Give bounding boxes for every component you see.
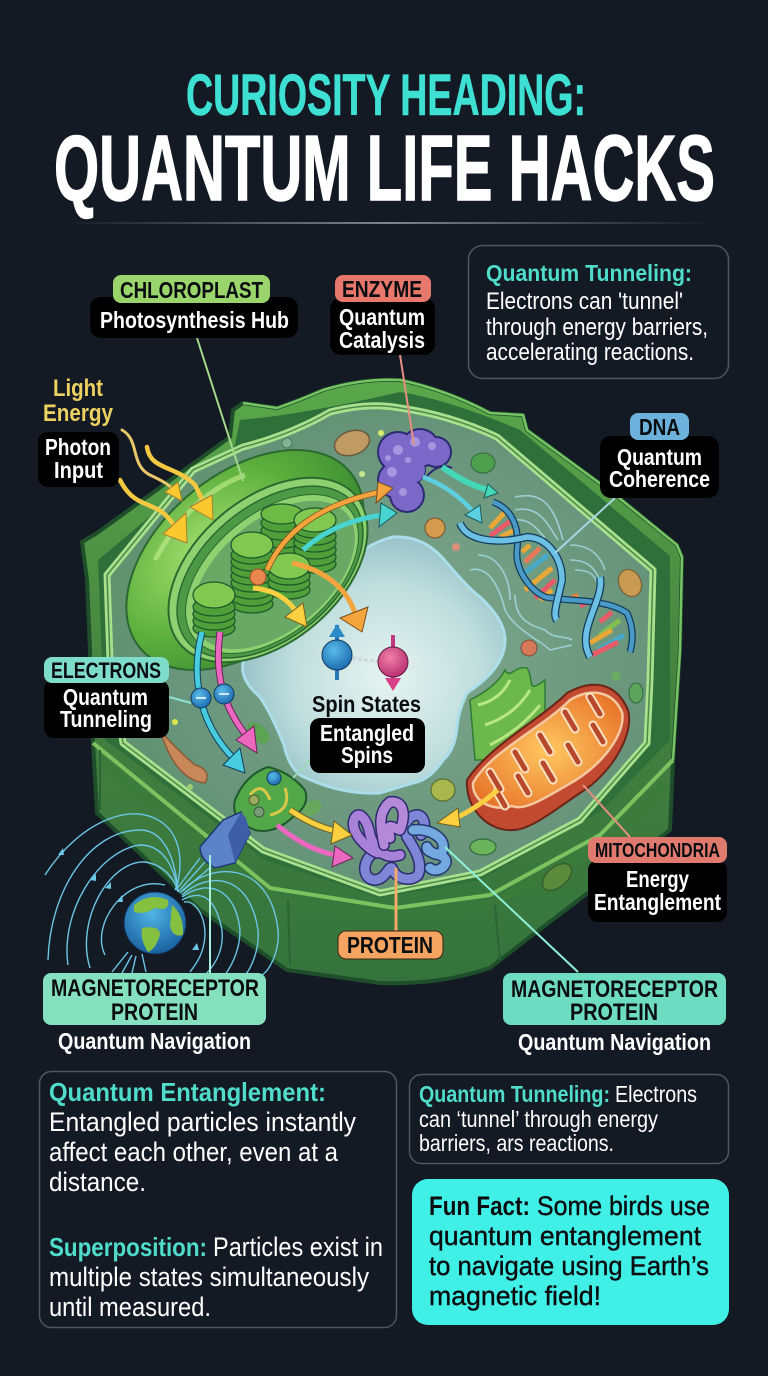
enzyme xyxy=(377,428,452,513)
arrow: enzyme to DNA teal xyxy=(442,467,498,498)
label: magnetoreceptor right xyxy=(503,973,726,1055)
label: magnetoreceptor left: Quantum Navigation xyxy=(58,1028,251,1054)
label: DNA: Quantum xyxy=(617,444,702,470)
arrow: orange to enzyme xyxy=(267,482,393,570)
panel: quantum tunneling top: through energy barriers, xyxy=(486,314,708,341)
panel: quantum tunneling bottom: barriers, ars reactions. xyxy=(419,1130,614,1156)
label: spin states: Entangled xyxy=(320,720,414,746)
label: magnetoreceptor right: PROTEIN xyxy=(570,999,658,1026)
arrow: enzyme to DNA cyan xyxy=(423,477,482,523)
label: spin states xyxy=(310,691,425,773)
label: electrons: Quantum xyxy=(63,684,148,710)
chloroplast xyxy=(85,406,405,714)
label: chloroplast: Photosynthesis Hub xyxy=(100,307,289,333)
vacuole xyxy=(243,537,505,793)
protein knot xyxy=(353,802,446,880)
panel: entanglement and superposition: Particles exist in xyxy=(213,1232,383,1262)
label: mitochondria: Entanglement xyxy=(594,889,721,915)
golgi xyxy=(470,668,545,760)
mitochondrion xyxy=(467,685,629,830)
panel: entanglement and superposition: Entangled particles instantly xyxy=(49,1107,356,1137)
grana stacks xyxy=(193,504,336,637)
panel: quantum tunneling bottom: Quantum Tunneling: xyxy=(419,1081,610,1107)
panel: quantum tunneling top: accelerating reactions. xyxy=(486,339,694,366)
arrow: pink to protein xyxy=(277,825,353,867)
panel: entanglement and superposition: multiple states simultaneously xyxy=(49,1262,369,1292)
earth xyxy=(124,892,186,954)
panel: entanglement and superposition: affect each other, even at a xyxy=(49,1137,339,1167)
arrow: yellow to protein xyxy=(290,810,352,844)
panel: quantum tunneling top xyxy=(468,246,728,378)
panel: entanglement and superposition: until measured. xyxy=(49,1292,211,1322)
label: magnetoreceptor left: MAGNETORECEPTOR xyxy=(51,975,259,1002)
label: DNA: DNA xyxy=(639,414,680,440)
label: enzyme: ENZYME xyxy=(342,276,422,302)
small organelles xyxy=(331,426,373,460)
panel: fun fact: to navigate using Earth’s xyxy=(429,1251,709,1281)
magnetoreceptor cylinder xyxy=(200,812,250,868)
label: enzyme xyxy=(330,275,435,355)
label: mitochondria xyxy=(588,837,727,922)
panel: fun fact: Some birds use xyxy=(537,1191,710,1221)
label: light energy xyxy=(38,375,119,487)
panel: fun fact: Fun Fact: xyxy=(429,1191,530,1221)
plant cell illustration xyxy=(45,380,682,983)
label: spin states: Spin States xyxy=(312,691,421,717)
panel: quantum tunneling bottom xyxy=(410,1074,728,1164)
icon: electrons xyxy=(191,684,234,708)
magnetic field lines xyxy=(45,814,278,975)
arrow: teal to enzyme xyxy=(303,503,397,550)
panel: fun fact: magnetic field! xyxy=(429,1281,601,1311)
label: electrons: Tunneling xyxy=(60,706,152,732)
panel: quantum tunneling bottom: Electrons xyxy=(615,1081,697,1107)
cell wall xyxy=(82,380,682,983)
label: chloroplast xyxy=(90,275,298,338)
label: DNA: Coherence xyxy=(609,466,710,492)
label: light energy: Input xyxy=(54,457,103,483)
title xyxy=(54,63,715,220)
label: spin states: Spins xyxy=(341,742,393,768)
panel: fun fact: quantum entanglement xyxy=(429,1221,701,1251)
panel: entanglement and superposition: Quantum Entanglement: xyxy=(49,1077,326,1107)
label: light energy: Light xyxy=(53,375,103,402)
arrow: pink electron path xyxy=(218,632,257,753)
DNA xyxy=(460,496,632,657)
label: chloroplast: CHLOROPLAST xyxy=(120,277,263,303)
label: magnetoreceptor left: PROTEIN xyxy=(111,999,198,1026)
cytoplasm xyxy=(107,406,653,893)
panel: quantum tunneling top: Quantum Tunneling: xyxy=(486,260,692,286)
label: light energy: Energy xyxy=(43,400,114,427)
arrow: light energy xyxy=(120,430,213,543)
label: magnetoreceptor left xyxy=(43,973,266,1054)
panel: entanglement and superposition: distance. xyxy=(49,1167,146,1197)
leader lines xyxy=(169,338,630,973)
label: magnetoreceptor right: Quantum Navigation xyxy=(518,1029,711,1055)
label: magnetoreceptor right: MAGNETORECEPTOR xyxy=(511,976,718,1003)
panel: quantum tunneling bottom: can ‘tunnel’ through energy xyxy=(419,1106,658,1132)
label: electrons xyxy=(44,657,169,738)
panel: quantum tunneling top: Electrons can 'tunnel' xyxy=(486,288,683,315)
label: enzyme: Quantum xyxy=(339,304,425,330)
arrow: cyan electron path xyxy=(197,632,245,773)
label: mitochondria: Energy xyxy=(626,866,689,892)
arrow: mitochondria to protein xyxy=(437,790,498,827)
spin states particles xyxy=(319,624,414,691)
arrow: yellow to vacuole xyxy=(253,588,307,627)
panel: entanglement and superposition xyxy=(40,1072,396,1328)
panel: fun fact xyxy=(412,1179,729,1325)
panel: entanglement and superposition: Superposition: xyxy=(49,1232,207,1262)
label: electrons: ELECTRONS xyxy=(51,658,161,683)
label: enzyme: Catalysis xyxy=(339,327,425,353)
arrow: orange to spins xyxy=(292,563,368,632)
green receptor organelle xyxy=(234,767,306,831)
label: DNA xyxy=(600,413,719,498)
label: light energy: Photon xyxy=(45,434,111,460)
label: protein: PROTEIN xyxy=(347,932,433,958)
label: mitochondria: MITOCHONDRIA xyxy=(595,840,720,862)
